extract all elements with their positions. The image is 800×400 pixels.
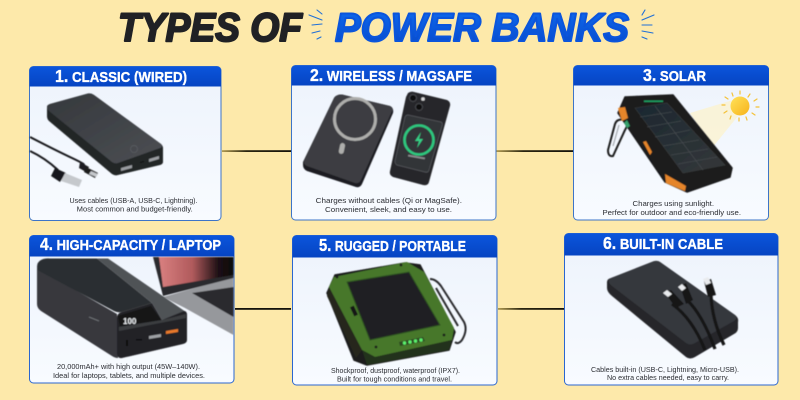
icon: magsafe bank — [303, 94, 393, 187]
icon: solar power bank with carabiner — [608, 95, 732, 192]
panel: classic — [30, 66, 221, 220]
body side — [37, 268, 118, 358]
heading: 2. WIRELESS / MAGSAFE — [310, 65, 472, 85]
connector: 4 to 5 — [235, 308, 291, 310]
LED display: 100 — [123, 317, 137, 326]
connector: 2 to 3 — [496, 150, 574, 152]
icon: rugged power bank with carabiner — [327, 262, 466, 365]
heading: 4. HIGH-CAPACITY / LAPTOP — [40, 234, 221, 254]
description: Most common and budget-friendly. — [77, 204, 193, 214]
description: Perfect for outdoor and eco-friendly use. — [602, 208, 741, 217]
description — [602, 199, 741, 217]
heading: 3. SOLAR — [643, 65, 706, 85]
icon: phone with charging ring — [390, 92, 450, 185]
description — [53, 362, 205, 380]
description: Convenient, sleek, and easy to use. — [325, 205, 452, 214]
panel: rugged — [292, 235, 497, 385]
icon: black power bank with cables — [30, 93, 163, 187]
panel: built-in cable — [564, 233, 778, 385]
description: Charges using sunlight. — [632, 199, 714, 208]
description — [316, 196, 462, 214]
panel: wireless — [292, 65, 496, 220]
connector: 5 to 6 — [498, 308, 564, 310]
panel: high capacity — [30, 234, 234, 383]
description: Cables built-in (USB-C, Lightning, Micro-USB). — [591, 365, 739, 374]
icon: right burst — [642, 10, 654, 39]
icon: power bank with built-in cables — [607, 261, 738, 358]
heading: 1. CLASSIC (WIRED) — [55, 66, 187, 86]
description: Shockproof, dustproof, waterproof (IPX7). — [331, 366, 460, 375]
title — [118, 6, 629, 50]
description — [331, 366, 460, 384]
description: Ideal for laptops, tablets, and multiple devices. — [53, 371, 205, 380]
icon: left burst — [309, 10, 322, 39]
description — [591, 365, 739, 382]
icon: large power bank — [37, 258, 187, 358]
title: power banks: POWER BANKS — [335, 6, 629, 50]
icon: sunbeam — [690, 100, 738, 148]
description — [70, 196, 198, 214]
body top — [37, 258, 152, 312]
title: types of: TYPES OF — [118, 6, 303, 50]
heading: 5. RUGGED / PORTABLE — [319, 235, 466, 255]
glossy strip — [97, 258, 186, 320]
description: No extra cables needed, easy to carry. — [607, 373, 729, 382]
description: Uses cables (USB-A, USB-C, Lightning). — [70, 196, 198, 205]
description: 20,000mAh+ with high output (45W–140W). — [57, 362, 200, 371]
front face — [117, 303, 187, 358]
icon: sun — [722, 91, 759, 121]
description: Charges without cables (Qi or MagSafe). — [316, 196, 462, 205]
panel: solar — [574, 65, 769, 220]
connector: 1 to 2 — [222, 150, 292, 152]
heading: 6. BUILT-IN CABLE — [603, 233, 723, 253]
icon: laptop — [153, 257, 234, 335]
description: Built for tough conditions and travel. — [337, 374, 452, 384]
